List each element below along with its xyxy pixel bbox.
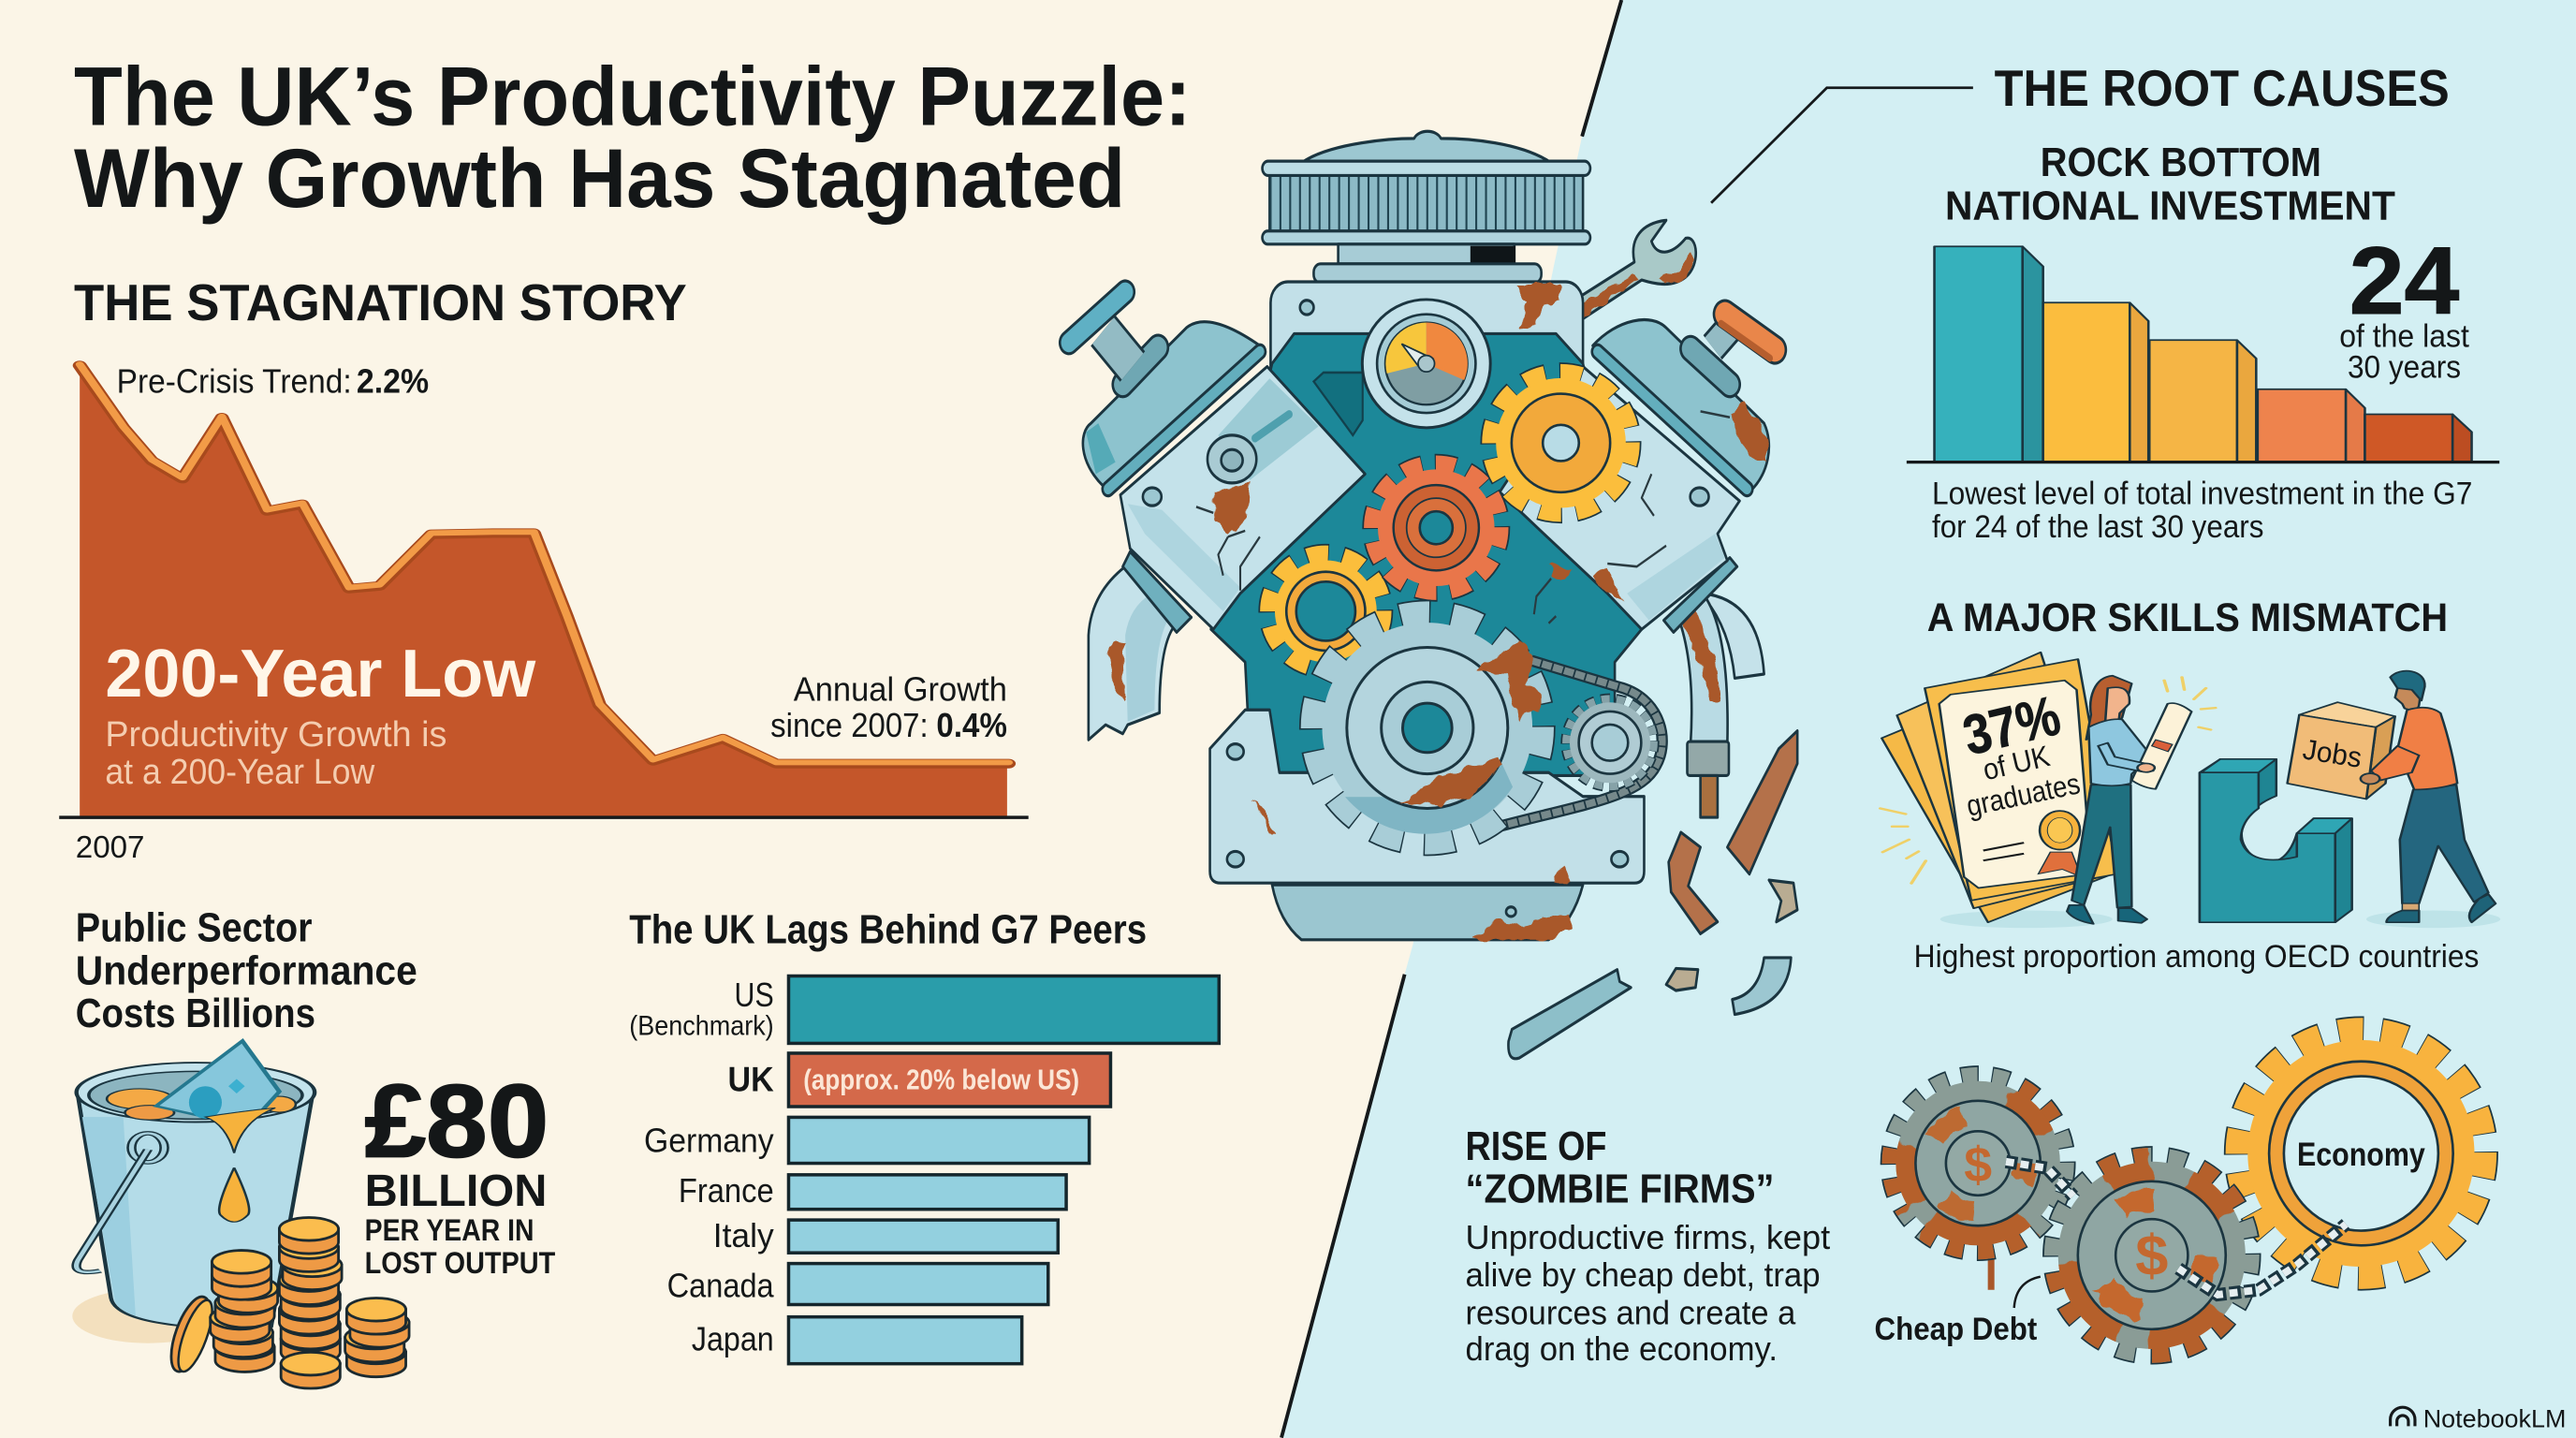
- title: Why Growth Has Stagnated: [74, 131, 1125, 225]
- gear: small belt pulley: [1567, 700, 1653, 785]
- stat: 80 billion lost output: £80: [365, 1064, 549, 1180]
- title: [74, 49, 1191, 225]
- stat: 80 billion lost output: PER YEAR IN: [365, 1213, 534, 1247]
- area chart: productivity growth: 200-Year Low: [105, 637, 536, 712]
- drip of rust: [1989, 1249, 1993, 1290]
- panel: rise of zombie firms: [1466, 1030, 2484, 1368]
- area chart: productivity growth: Productivity Growth is: [105, 714, 446, 754]
- panel: rise of zombie firms: drag on the economy.: [1466, 1329, 1778, 1368]
- bar chart: G7 productivity comparison: US: [735, 976, 774, 1014]
- panel: rock bottom national investment: 24: [2349, 227, 2460, 334]
- right cylinder: [1500, 314, 1775, 632]
- panel: rise of zombie firms: resources and create a: [1466, 1294, 1795, 1332]
- panel: rise of zombie firms: alive by cheap debt, trap: [1466, 1255, 1821, 1294]
- gear: rusty zombie firm right: $: [2135, 1224, 2168, 1288]
- area chart: productivity growth: since 2007:: [770, 706, 929, 744]
- bar chart: G7 productivity comparison: Japan: [692, 1320, 774, 1358]
- area chart: productivity growth: 2.2%: [357, 361, 429, 400]
- panel: rise of zombie firms: RISE OF: [1466, 1123, 1606, 1169]
- chains linking the gears: [2006, 1162, 2346, 1295]
- area chart: productivity growth: Pre-Crisis Trend:: [117, 361, 352, 400]
- panel: skills mismatch: Highest proportion among OECD countries: [1914, 939, 2479, 975]
- gear: large grey flywheel: [1312, 613, 1543, 843]
- panel: skills mismatch: 37%: [1957, 683, 2066, 767]
- panel: skills mismatch: [1881, 595, 2500, 975]
- heading: public sector underperformance: Underperformance: [76, 947, 417, 993]
- heading: public sector underperformance: [76, 905, 417, 1036]
- panel: rock bottom national investment: [1907, 139, 2499, 545]
- engine block: [1211, 282, 1642, 775]
- rust patches and debris: [1402, 641, 1797, 1059]
- lower plate and oil pan: [1210, 710, 1644, 940]
- heading: UK lags behind G7 peers: The UK Lags Behind G7 Peers: [629, 906, 1147, 952]
- panel: rock bottom national investment: 30 years: [2348, 350, 2461, 386]
- gear: small yellow: [1268, 553, 1383, 668]
- panel: skills mismatch: graduates: [1964, 766, 2083, 823]
- panel: rise of zombie firms: “ZOMBIE FIRMS”: [1466, 1167, 1774, 1212]
- gear: rusty zombie firm right: [2053, 1157, 2250, 1354]
- illustration: broken engine: [1069, 131, 1797, 1059]
- left cylinder: [1069, 292, 1365, 632]
- gear: economy: [2238, 1030, 2484, 1277]
- exhaust pipes: [1089, 566, 1764, 817]
- gauge: [1362, 300, 1490, 428]
- icon: leaking bucket with coins: [72, 1041, 409, 1388]
- air filter: [1263, 131, 1590, 283]
- bar chart: investment steps: [1907, 246, 2499, 462]
- stat: 80 billion lost output: [365, 1064, 555, 1280]
- panel: rock bottom national investment: for 24 of the last 30 years: [1932, 509, 2263, 545]
- illustration: certificates, graduate and job mismatch: [1881, 653, 2500, 928]
- panel: skills mismatch: of UK: [1980, 739, 2053, 786]
- gear: large yellow: [1490, 373, 1632, 514]
- gear: rusty zombie firm left: $: [1964, 1137, 1992, 1193]
- notebooklm mark: NotebookLM: [2423, 1404, 2566, 1433]
- connector line to root causes: [1711, 88, 1973, 203]
- panel: rock bottom national investment: NATIONAL INVESTMENT: [1945, 183, 2395, 229]
- title: The UK’s Productivity Puzzle:: [74, 49, 1191, 142]
- bar chart: G7 productivity comparison: (Benchmark): [629, 1011, 774, 1042]
- heading: the stagnation story: THE STAGNATION STORY: [74, 274, 687, 331]
- icon: wrench: [1578, 220, 1696, 319]
- panel: skills mismatch: Jobs: [2301, 732, 2364, 774]
- area chart: productivity growth: 2007: [76, 830, 145, 865]
- bar chart: G7 productivity comparison: [629, 976, 1219, 1364]
- gear: orange: [1372, 463, 1500, 592]
- heading: public sector underperformance: Public Sector: [76, 905, 313, 951]
- bar chart: G7 productivity comparison: Canada: [667, 1267, 774, 1305]
- bar chart: G7 productivity comparison: UK: [728, 1060, 774, 1098]
- area chart: productivity growth: at a 200-Year Low: [105, 752, 375, 791]
- heading: the root causes: THE ROOT CAUSES: [1995, 60, 2450, 117]
- area chart: productivity growth: Annual Growth: [794, 670, 1007, 709]
- stat: 80 billion lost output: BILLION: [365, 1166, 547, 1216]
- gear: economy: Economy: [2297, 1137, 2425, 1173]
- callout: cheap debt: [1875, 1277, 2041, 1347]
- heading: public sector underperformance: Costs Billions: [76, 990, 315, 1036]
- panel: skills mismatch: A MAJOR SKILLS MISMATCH: [1927, 595, 2448, 640]
- bar chart: G7 productivity comparison: France: [679, 1171, 774, 1210]
- panel: rock bottom national investment: Lowest level of total investment in the G7: [1932, 476, 2472, 511]
- panel: rock bottom national investment: ROCK BOTTOM: [2041, 139, 2321, 185]
- area chart: productivity growth: [59, 361, 1029, 865]
- callout: cheap debt: Cheap Debt: [1875, 1312, 2037, 1347]
- stat: 80 billion lost output: LOST OUTPUT: [365, 1246, 555, 1280]
- panel: rise of zombie firms: Unproductive firms, kept: [1466, 1218, 1830, 1256]
- area chart: productivity growth: 0.4%: [936, 706, 1007, 744]
- bar chart: G7 productivity comparison: (approx. 20% below US): [803, 1064, 1079, 1096]
- gear: rusty zombie firm left: [1891, 1077, 2065, 1251]
- bar chart: G7 productivity comparison: Italy: [713, 1216, 774, 1255]
- bar chart: G7 productivity comparison: Germany: [644, 1121, 774, 1159]
- timing belt: [1486, 661, 1662, 829]
- panel: rock bottom national investment: of the last: [2339, 318, 2469, 354]
